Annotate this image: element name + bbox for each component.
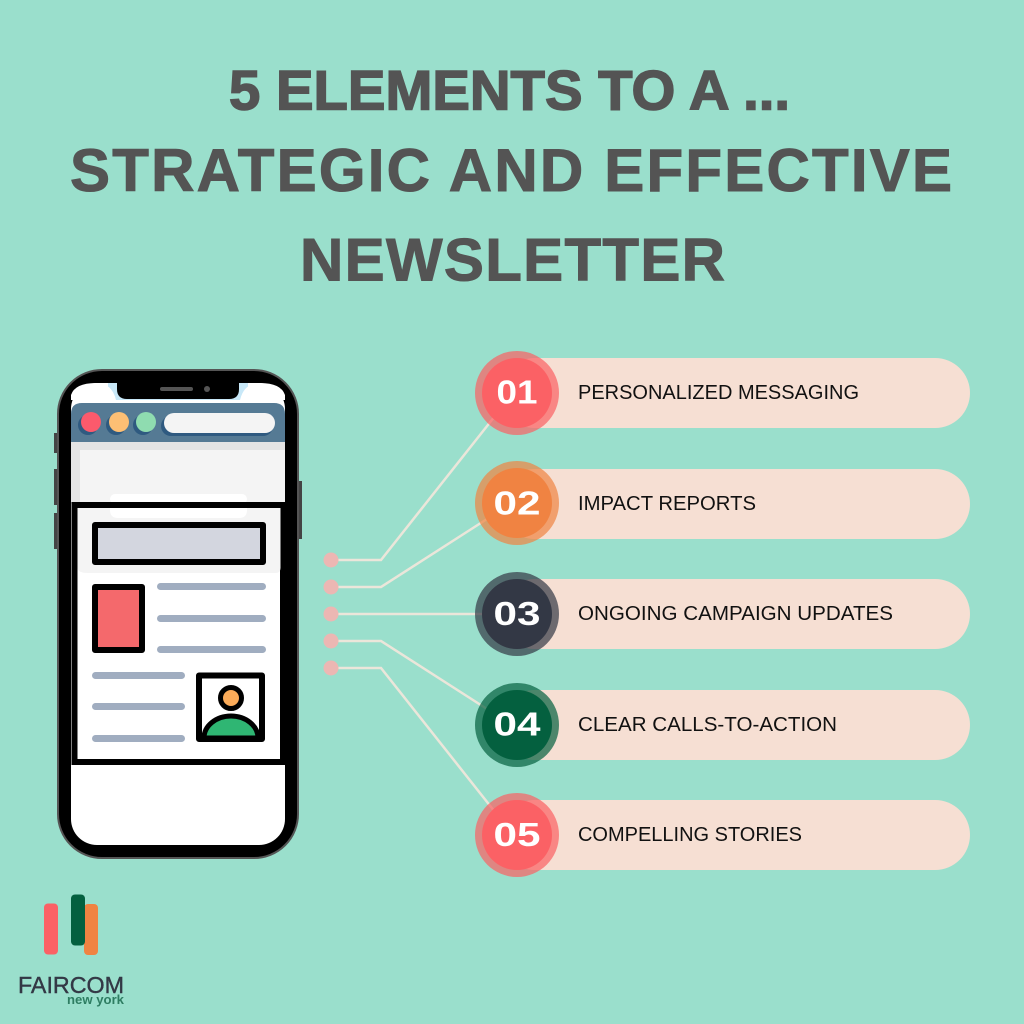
icon: logo bars (44, 894, 98, 955)
item 04: 04 (494, 706, 541, 742)
title: STRATEGIC AND EFFECTIVE (70, 137, 952, 204)
item 02 (475, 461, 970, 545)
icon: profile picture (199, 676, 262, 742)
logo: Faircom New York: FAIRCOM (18, 972, 124, 998)
item 01 (475, 351, 970, 435)
connector dots (324, 552, 338, 676)
logo: Faircom New York: new york (67, 992, 125, 1007)
item 02: IMPACT REPORTS (578, 493, 756, 515)
item 04 (475, 683, 970, 767)
newsletter page (74, 505, 283, 762)
item 05: 05 (494, 816, 540, 853)
item 02: 02 (494, 484, 540, 522)
text lines right (157, 583, 266, 653)
logo: Faircom New York (18, 894, 125, 1007)
item 03: 03 (494, 595, 540, 632)
item 03 (475, 572, 970, 656)
item 03: ONGOING CAMPAIGN UPDATES (578, 603, 893, 625)
red image block (95, 587, 142, 650)
title: 5 ELEMENTS TO A ... (229, 58, 790, 122)
item 01: PERSONALIZED MESSAGING (578, 382, 859, 404)
item 04: CLEAR CALLS-TO-ACTION (578, 714, 837, 736)
title (70, 58, 952, 294)
notch (117, 383, 239, 399)
item 05: COMPELLING STORIES (578, 824, 802, 846)
header block (95, 525, 263, 562)
text lines left (92, 672, 185, 742)
browser bar (71, 403, 285, 504)
item 05 (475, 793, 970, 877)
title: NEWSLETTER (300, 226, 725, 294)
icon: smartphone with newsletter (54, 370, 302, 858)
connector lines (331, 416, 495, 812)
item 01: 01 (496, 374, 538, 410)
